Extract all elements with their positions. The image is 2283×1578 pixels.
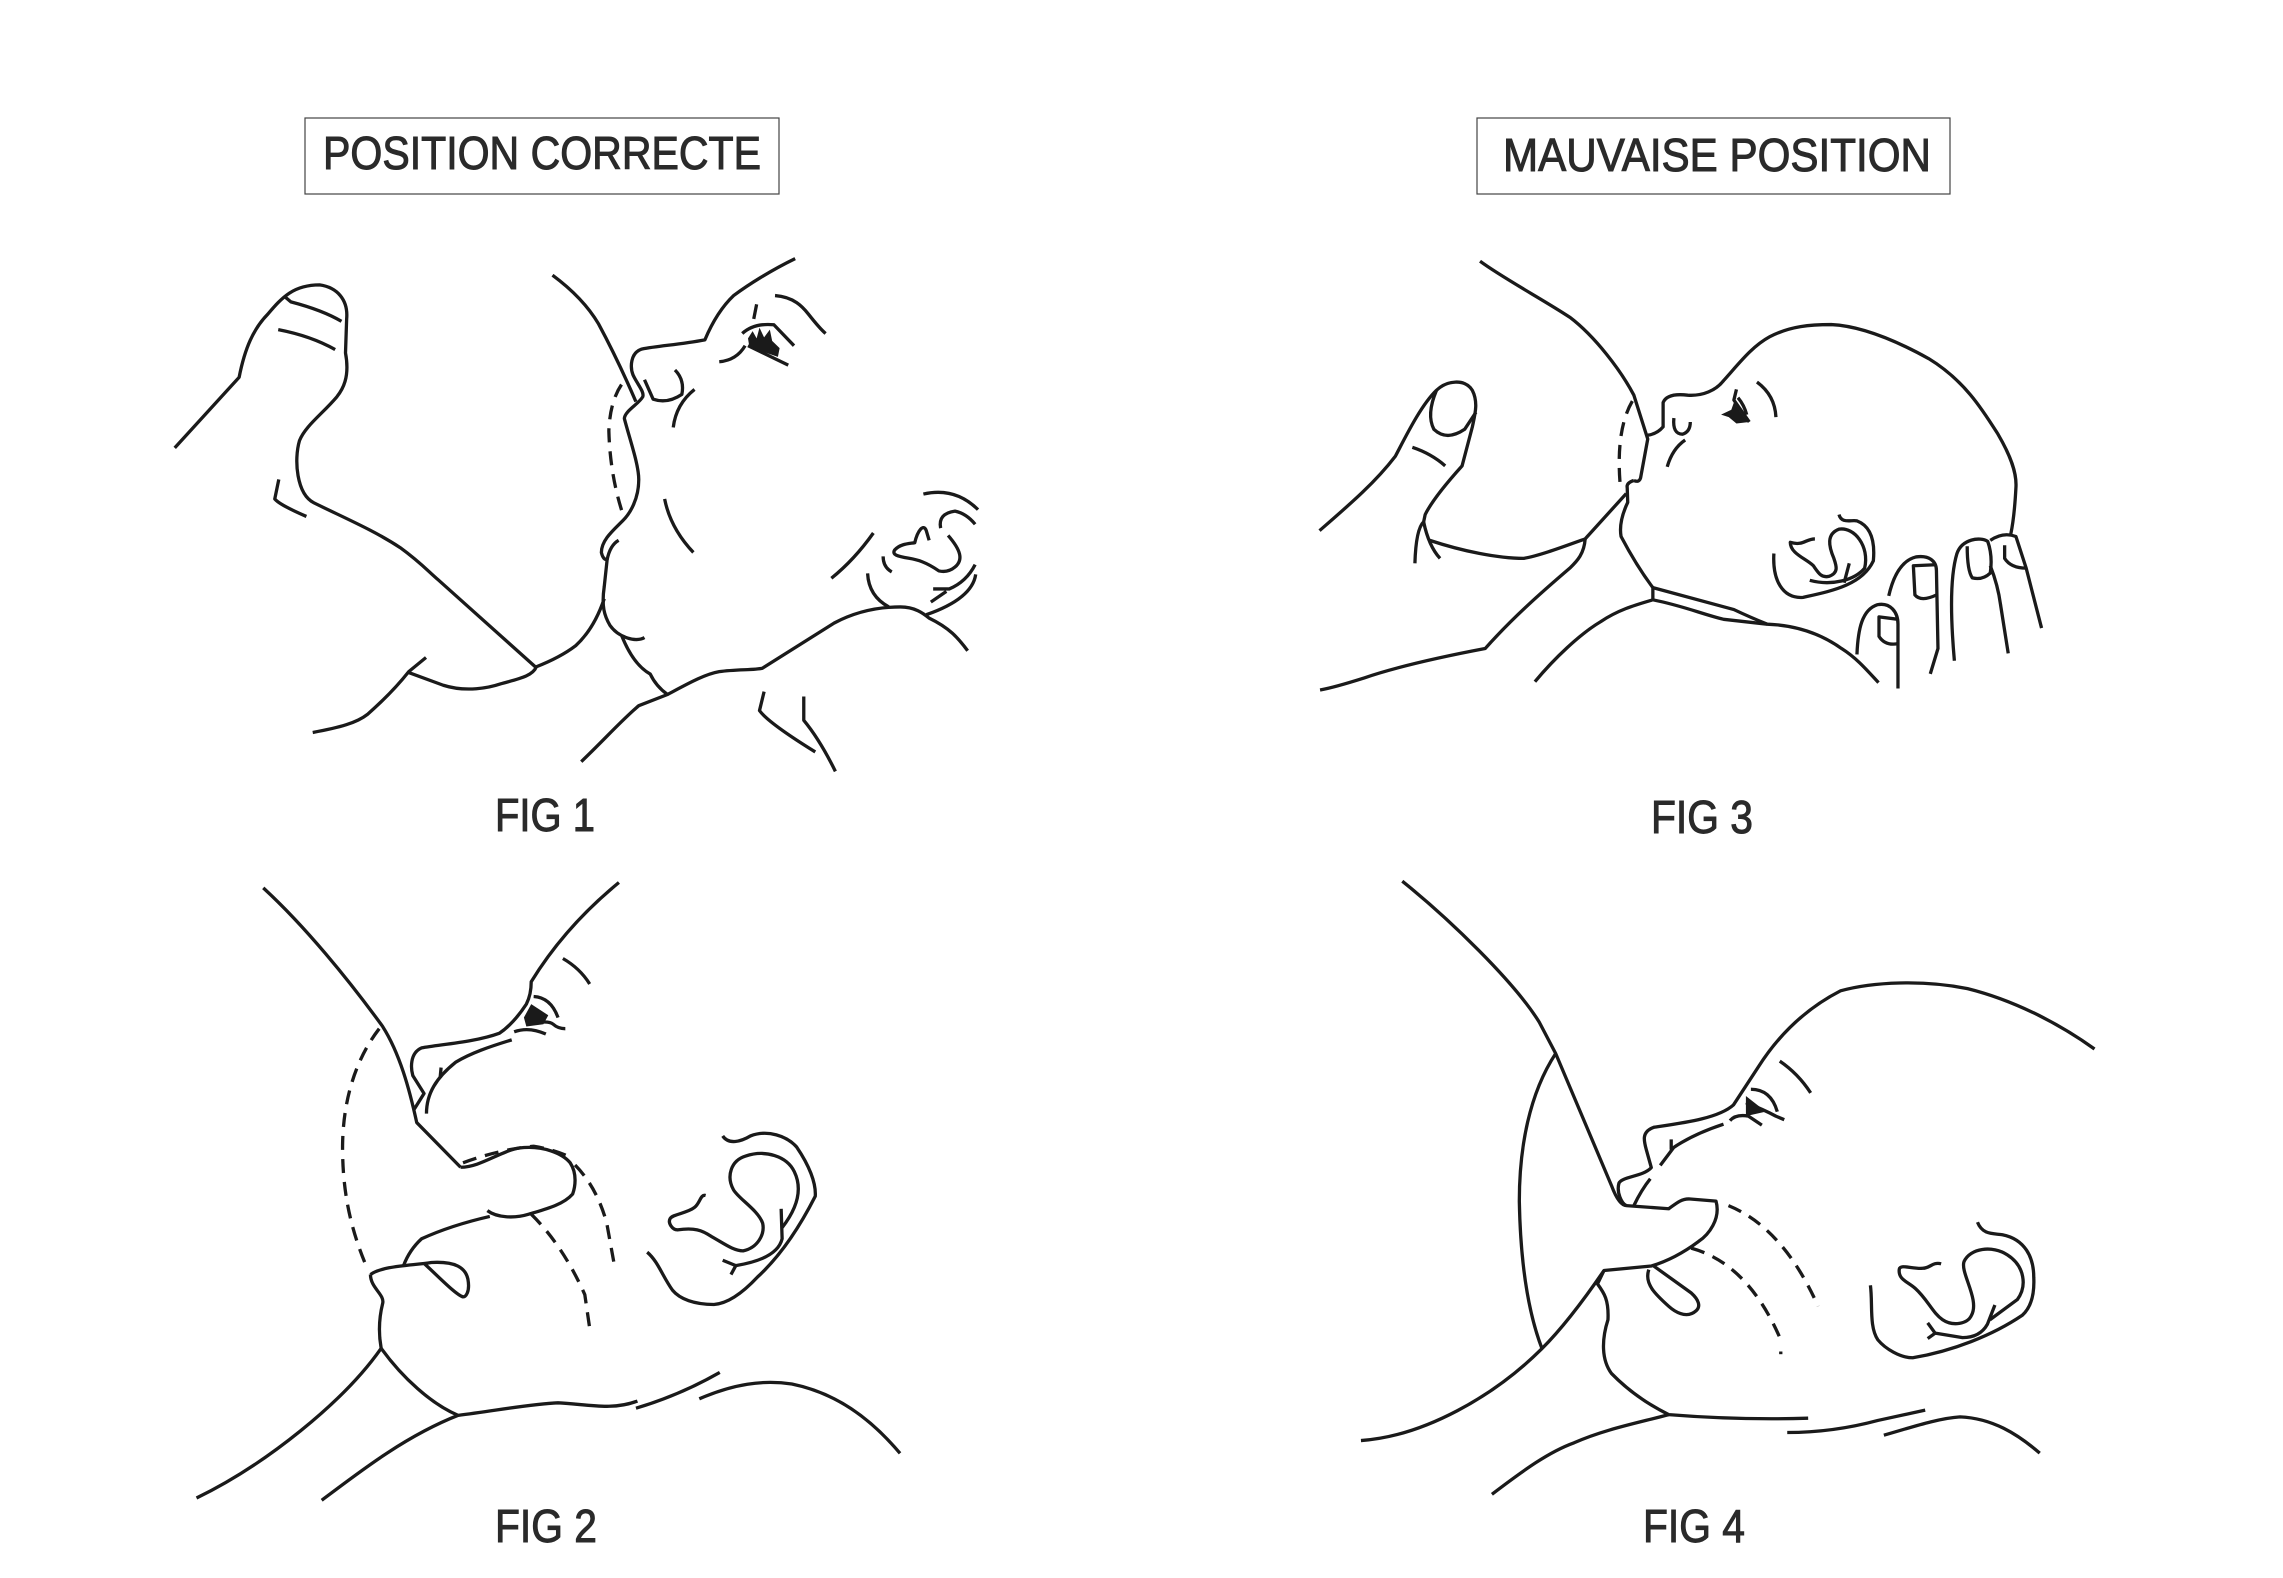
heading: position correcte xyxy=(305,118,779,194)
label: fig 1: FIG 1 xyxy=(495,789,595,841)
label: fig 3: FIG 3 xyxy=(1651,791,1753,843)
heading: position correcte: POSITION CORRECTE xyxy=(323,127,761,179)
heading: mauvaise position: MAUVAISE POSITION xyxy=(1503,129,1931,181)
figure 2 illustration: correct latch cross-section xyxy=(197,883,900,1500)
figure 1 illustration: correct latch xyxy=(175,259,978,771)
label: fig 4: FIG 4 xyxy=(1643,1500,1745,1552)
label: fig 2: FIG 2 xyxy=(495,1500,597,1552)
figure 3 illustration: poor latch xyxy=(1320,261,2042,690)
heading: mauvaise position xyxy=(1477,118,1950,194)
figure 4 illustration: poor latch cross-section xyxy=(1361,881,2095,1494)
